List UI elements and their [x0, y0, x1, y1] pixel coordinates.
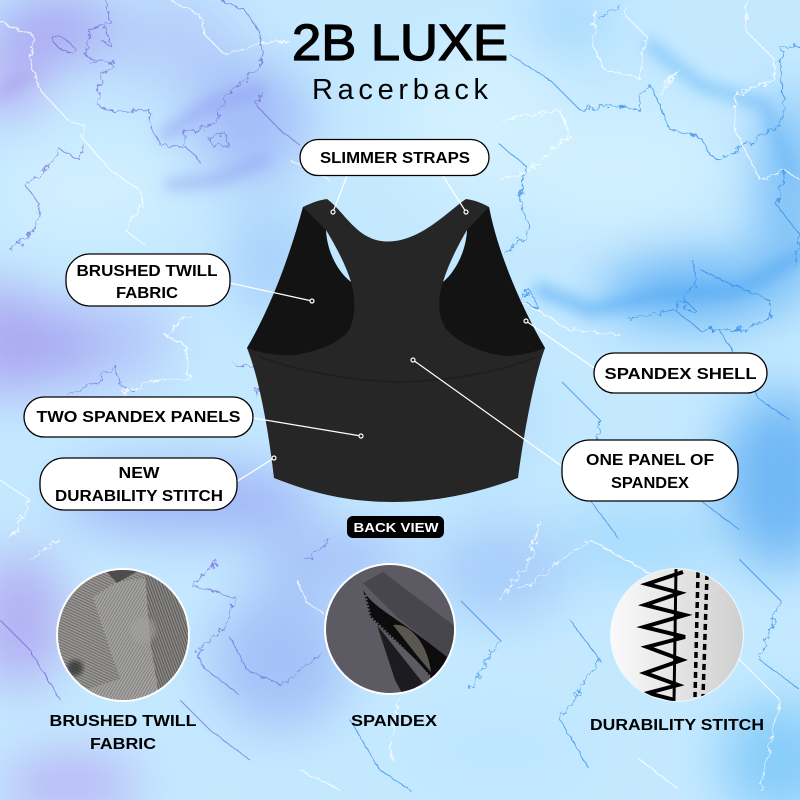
label: one panel of spandex: SPANDEX: [611, 475, 690, 492]
label: new durability stitch: DURABILITY STITCH: [55, 488, 223, 505]
label: two spandex panels: TWO SPANDEX PANELS: [36, 409, 240, 426]
label: new durability stitch: [40, 458, 237, 510]
label: slimmer straps: [300, 140, 489, 176]
garment body: [247, 199, 545, 502]
label: brushed twill fabric: BRUSHED TWILL: [76, 263, 218, 280]
caption: brushed twill fabric: BRUSHED TWILL: [50, 713, 197, 730]
caption: spandex: SPANDEX: [351, 713, 437, 730]
left dark shell panel: [247, 207, 354, 355]
label: one panel of spandex: [562, 440, 738, 501]
callout lines and markers: [230, 176, 600, 482]
swatch: brushed twill fabric: [55, 565, 195, 705]
badge: back view: BACK VIEW: [354, 520, 439, 535]
seam: [260, 357, 537, 382]
badge: back view: [347, 516, 444, 538]
swatch: durability stitch: [610, 568, 744, 702]
label: slimmer straps: SLIMMER STRAPS: [320, 150, 470, 167]
label: two spandex panels: [24, 397, 253, 437]
label: one panel of spandex: ONE PANEL OF: [586, 452, 714, 469]
caption: durability stitch: DURABILITY STITCH: [590, 717, 764, 734]
caption: brushed twill fabric: [50, 713, 197, 753]
left cutout: [326, 230, 351, 282]
right dark shell panel: [439, 207, 545, 356]
right cutout: [443, 230, 467, 282]
caption: brushed twill fabric: FABRIC: [90, 736, 156, 753]
subtitle: Racerback: [312, 74, 488, 106]
label: spandex shell: SPANDEX SHELL: [604, 366, 756, 383]
label: new durability stitch: NEW: [118, 465, 160, 482]
label: brushed twill fabric: [66, 254, 230, 306]
title: 2B LUXE: [292, 14, 508, 71]
label: brushed twill fabric: FABRIC: [116, 285, 178, 302]
swatch: spandex: [324, 563, 460, 695]
garment: racerback top, back view: [247, 199, 545, 502]
label: spandex shell: [594, 353, 767, 393]
